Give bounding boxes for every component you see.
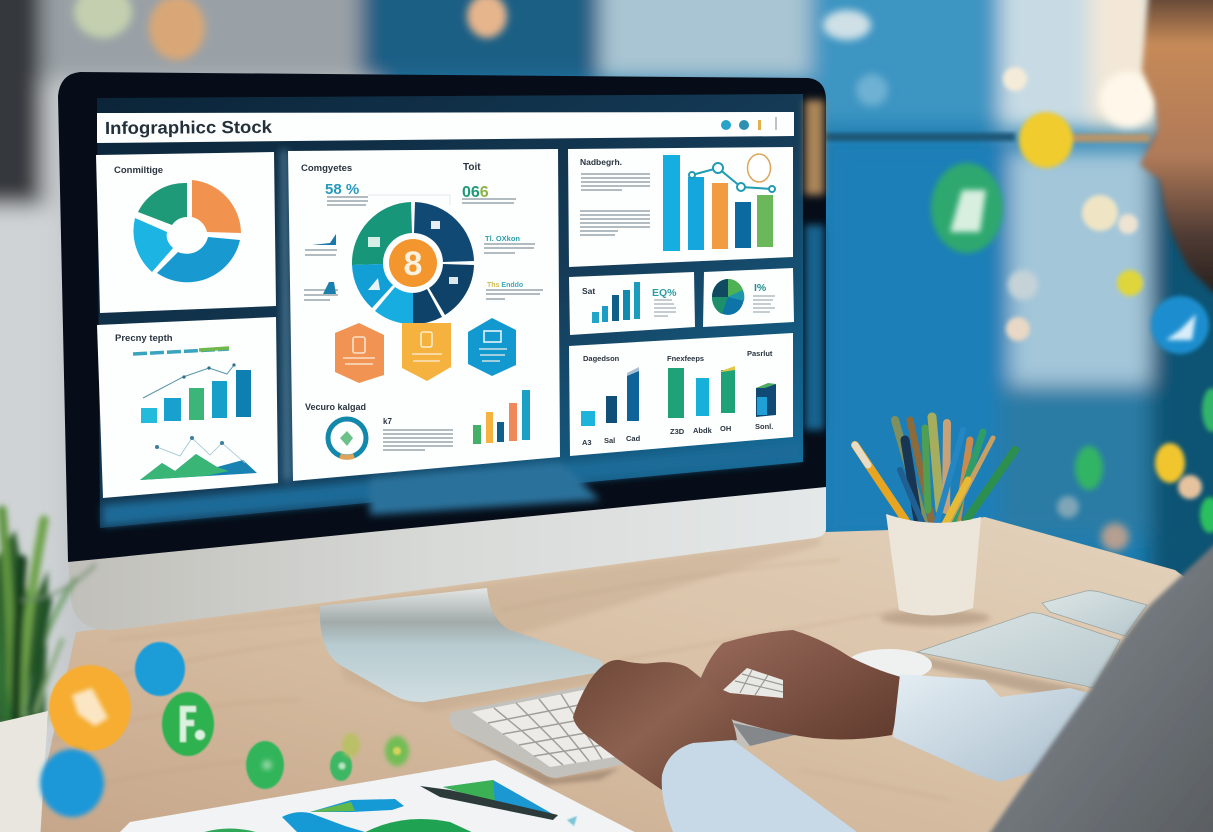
- title bar: Infographicc Stock: [105, 117, 272, 138]
- small bar chart: [473, 390, 530, 444]
- bokeh lights: [74, 0, 1213, 551]
- left hand: [573, 660, 737, 790]
- icon labels: [312, 234, 523, 294]
- panel: bottom right bars: Z3D: [670, 427, 685, 436]
- panel: central infographic: 58 %: [325, 181, 359, 198]
- panel: bottom right bars: Dagedson: [583, 354, 620, 363]
- panel: donut chart: [96, 152, 276, 313]
- radial wheel: 8: [404, 245, 422, 283]
- panel: trend charts: [97, 317, 278, 498]
- monitor: [58, 72, 826, 702]
- panel: trend charts: Precny tepth: [115, 333, 173, 344]
- panel: small pie: I%: [754, 282, 767, 294]
- icon labels: Tl. OXkon: [485, 234, 520, 243]
- panel: central infographic: 066: [462, 184, 489, 201]
- panel: small pie: [703, 268, 794, 327]
- panel: bottom right bars: Fnexfeeps: [667, 354, 704, 363]
- panel: central infographic: Toit: [463, 162, 481, 173]
- leaves: [0, 510, 95, 725]
- panel: central infographic: Comgyetes: [301, 163, 352, 174]
- panel: small bars: Sat: [582, 286, 595, 296]
- key gaps: [735, 670, 783, 695]
- mouse: [846, 649, 932, 681]
- panel: bottom right bars: Abdk: [693, 426, 713, 435]
- panel: central infographic: [288, 149, 560, 481]
- screen reflections: [103, 100, 824, 526]
- document on desk: [112, 760, 650, 832]
- icon labels: Ths Enddo: [487, 282, 523, 289]
- desk: [30, 517, 1213, 832]
- panel: bottom right bars: OH: [720, 424, 731, 433]
- floating icon bubbles: [40, 642, 409, 817]
- document charts: [195, 780, 577, 832]
- panel: top right chart: Nadbegrh.: [580, 157, 622, 167]
- monitor chin: [68, 480, 826, 630]
- monitor bezel: [58, 72, 826, 562]
- panel: bottom right bars: A3: [582, 438, 592, 447]
- tablet and phone: [917, 591, 1147, 688]
- area chart: [140, 436, 257, 480]
- ring gauge: [328, 419, 366, 457]
- panel: bottom right bars: Pasrlut: [747, 349, 773, 358]
- keyboard: [450, 668, 795, 778]
- panel: small bars: [569, 272, 695, 335]
- bar chart: [141, 363, 251, 423]
- caption lines: [304, 197, 543, 450]
- hexagon cards: [335, 318, 516, 383]
- title bar icons: [721, 117, 777, 130]
- panel: central infographic: k7: [383, 417, 392, 426]
- person face: [1140, 0, 1213, 300]
- panel: bottom right bars: Cad: [626, 434, 641, 443]
- right hand: [700, 630, 905, 739]
- panel: top right chart: [568, 147, 793, 267]
- pencils: [855, 417, 1015, 524]
- screen: [97, 94, 803, 528]
- pencil cup with pencils: [855, 417, 1015, 616]
- pen: [420, 786, 558, 820]
- panel: bottom right bars: Sonl.: [755, 422, 773, 431]
- plant pot: [0, 711, 48, 832]
- radial wheel: [352, 202, 474, 324]
- panel: bottom right bars: Sal: [604, 436, 615, 445]
- desk wood grain and shadows: [40, 536, 1088, 800]
- lower sleeve: [662, 740, 857, 832]
- panel: small bars: EQ%: [652, 287, 677, 299]
- panel: central infographic: Vecuro kalgad: [305, 402, 366, 412]
- monitor stand: [320, 588, 603, 702]
- visible keys between fingers: [723, 668, 783, 698]
- plant: [0, 510, 95, 832]
- sleeve and cuff: [893, 674, 1095, 782]
- shirt shoulder: [985, 530, 1213, 832]
- panel: bottom right bars: [569, 333, 793, 456]
- hands: [573, 630, 905, 790]
- panel: donut chart: Conmiltige: [114, 165, 163, 176]
- title bar: [97, 112, 794, 143]
- cup: [886, 514, 981, 616]
